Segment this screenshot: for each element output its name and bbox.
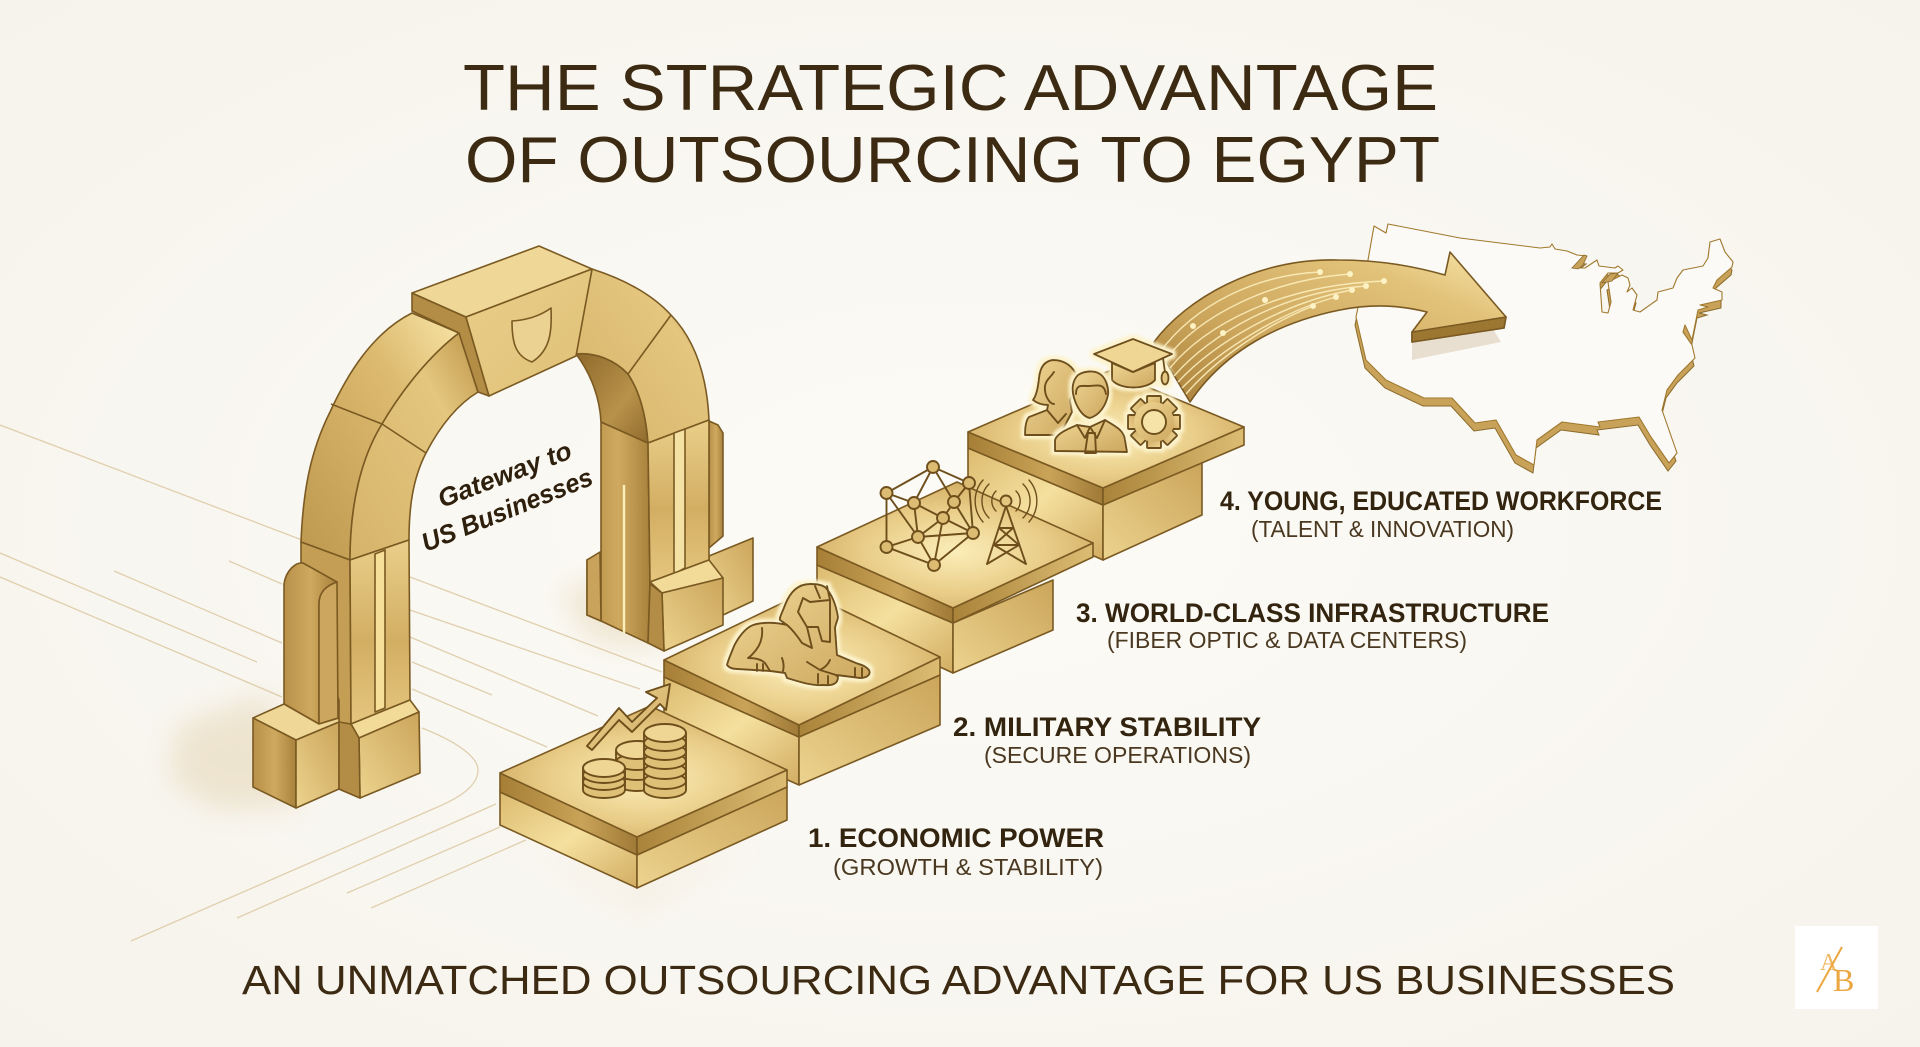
right arch underside	[576, 354, 648, 443]
label: step 4: (TALENT & INNOVATION)	[1251, 516, 1514, 542]
pillar light strip	[375, 550, 385, 712]
icon: network	[880, 461, 979, 571]
icon: sphinx	[727, 584, 870, 685]
label: step 2	[953, 712, 1261, 768]
icon: gear	[1128, 396, 1180, 448]
label: step 1: 1. ECONOMIC POWER	[808, 823, 1104, 853]
label: step 2: (SECURE OPERATIONS)	[984, 742, 1251, 768]
right front block	[650, 560, 723, 593]
label: step 3: 3. WORLD-CLASS INFRASTRUCTURE	[1076, 598, 1549, 628]
lake gold patches	[1572, 255, 1618, 283]
gateway caption: US Businesses	[417, 462, 597, 558]
icon: coin stacks	[583, 724, 686, 798]
fiber nodes	[1190, 269, 1387, 336]
icon: graduation cap	[1094, 339, 1172, 388]
inner right pillar	[587, 422, 650, 643]
gateway caption: Gateway to	[433, 435, 576, 514]
step 2	[664, 592, 940, 785]
label: step 2: 2. MILITARY STABILITY	[953, 712, 1261, 742]
step 3	[817, 482, 1093, 673]
logo badge: B	[1833, 962, 1854, 998]
gateway arch	[253, 246, 753, 808]
keystone front	[466, 269, 592, 396]
title: THE STRATEGIC ADVANTAGE	[463, 51, 1438, 124]
label: step 1	[808, 823, 1104, 880]
icon: woman	[1025, 360, 1075, 435]
label: step 4	[1220, 486, 1662, 542]
right pillar front	[648, 420, 709, 582]
title	[463, 51, 1440, 196]
fiber lines	[1160, 272, 1384, 394]
left buttress	[284, 563, 337, 724]
left arch outer surface	[301, 313, 459, 560]
left buttress strip	[319, 582, 338, 724]
right tab	[709, 421, 723, 548]
curved arrow to the US	[1154, 252, 1506, 402]
keystone top	[412, 246, 592, 317]
label: step 3	[1076, 598, 1549, 653]
left base block	[253, 704, 339, 740]
keystone left side	[412, 293, 489, 396]
step 1	[500, 706, 787, 888]
map extrusion	[1355, 232, 1732, 473]
map surface	[1356, 224, 1733, 465]
label: step 1: (GROWTH & STABILITY)	[833, 854, 1103, 880]
title: OF OUTSOURCING TO EGYPT	[465, 123, 1440, 196]
shield emblem	[512, 308, 551, 362]
right back base	[709, 538, 753, 615]
label: step 3: (FIBER OPTIC & DATA CENTERS)	[1107, 627, 1467, 653]
inner right pillar left base	[587, 552, 601, 621]
label: step 4: 4. YOUNG, EDUCATED WORKFORCE	[1220, 486, 1662, 516]
icon: man	[1055, 371, 1127, 453]
footer tagline: AN UNMATCHED OUTSOURCING ADVANTAGE FOR US BUSINESSES	[242, 957, 1675, 1003]
ground shadows	[170, 570, 760, 905]
perspective guide lines	[0, 425, 662, 941]
left front block	[351, 700, 419, 738]
left pillar front	[350, 540, 410, 724]
usa map	[1355, 224, 1733, 473]
icon: growth arrow	[587, 684, 670, 750]
left pillar side	[301, 542, 360, 798]
logo badge: A	[1820, 950, 1838, 976]
step 4	[968, 371, 1244, 560]
icon: signal tower	[975, 480, 1037, 564]
left arch front	[350, 333, 478, 560]
right arch front	[576, 269, 709, 443]
logo badge	[1795, 926, 1878, 1009]
